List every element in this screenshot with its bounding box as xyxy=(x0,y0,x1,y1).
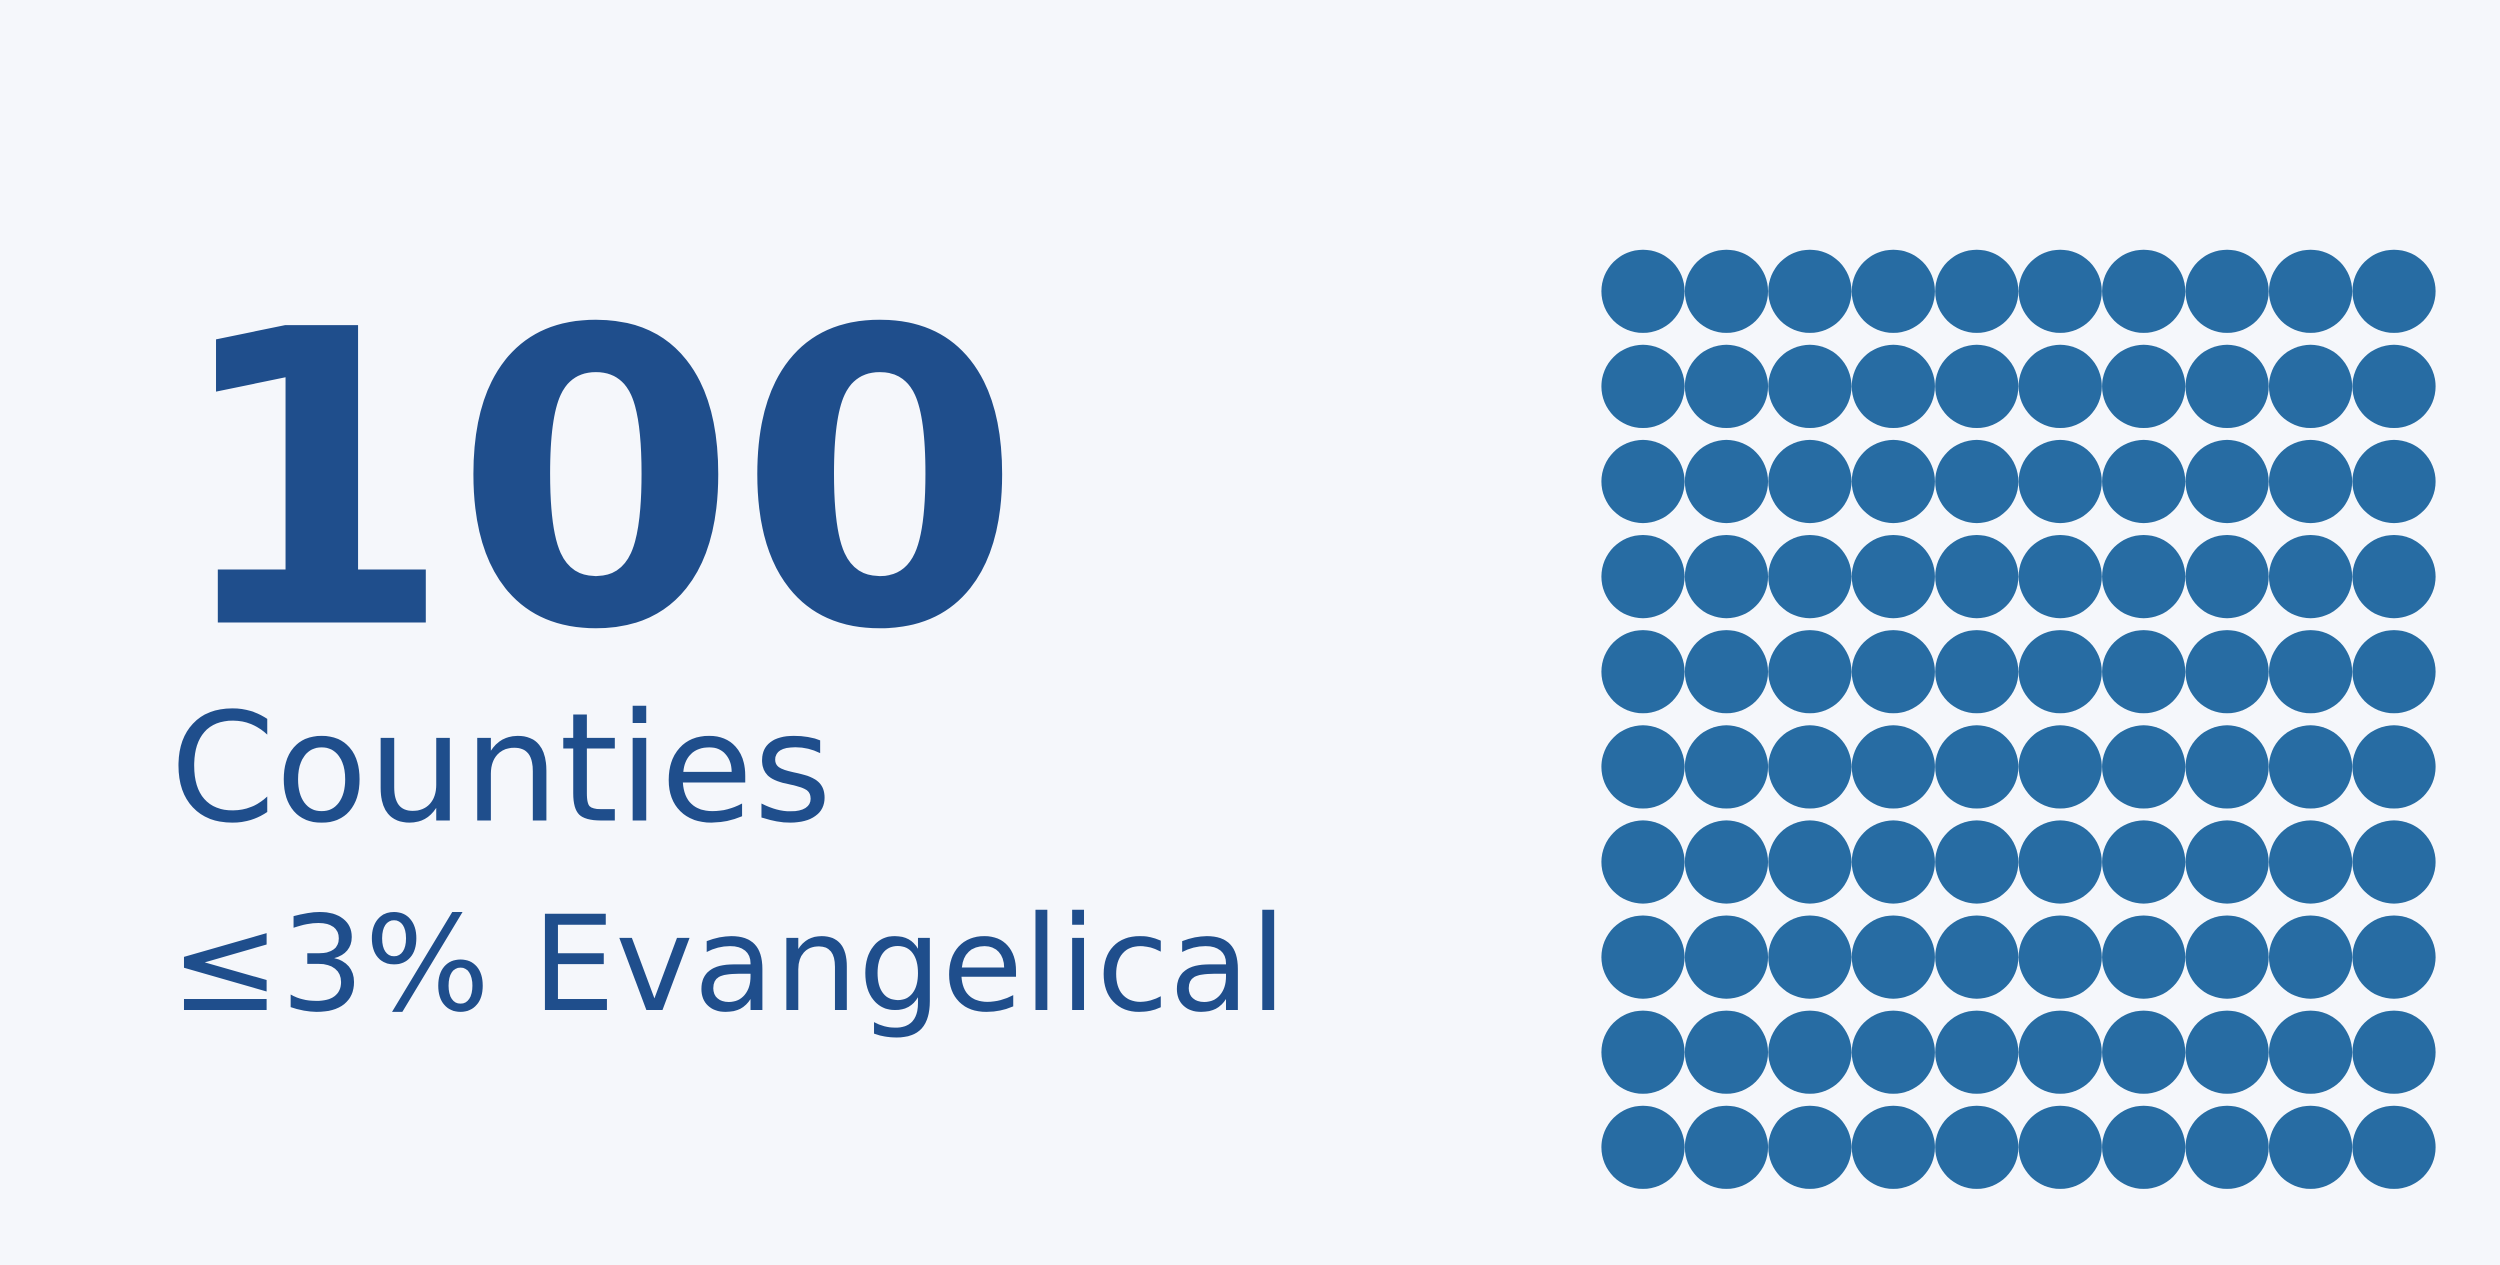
big number: 100: 100 xyxy=(170,244,1022,720)
dot grid: 100 circles representing counties xyxy=(1601,250,2436,1189)
label: at most 3% Evangelical: ≤3% Evangelical xyxy=(170,888,1287,1042)
label: Counties: Counties xyxy=(170,680,832,856)
